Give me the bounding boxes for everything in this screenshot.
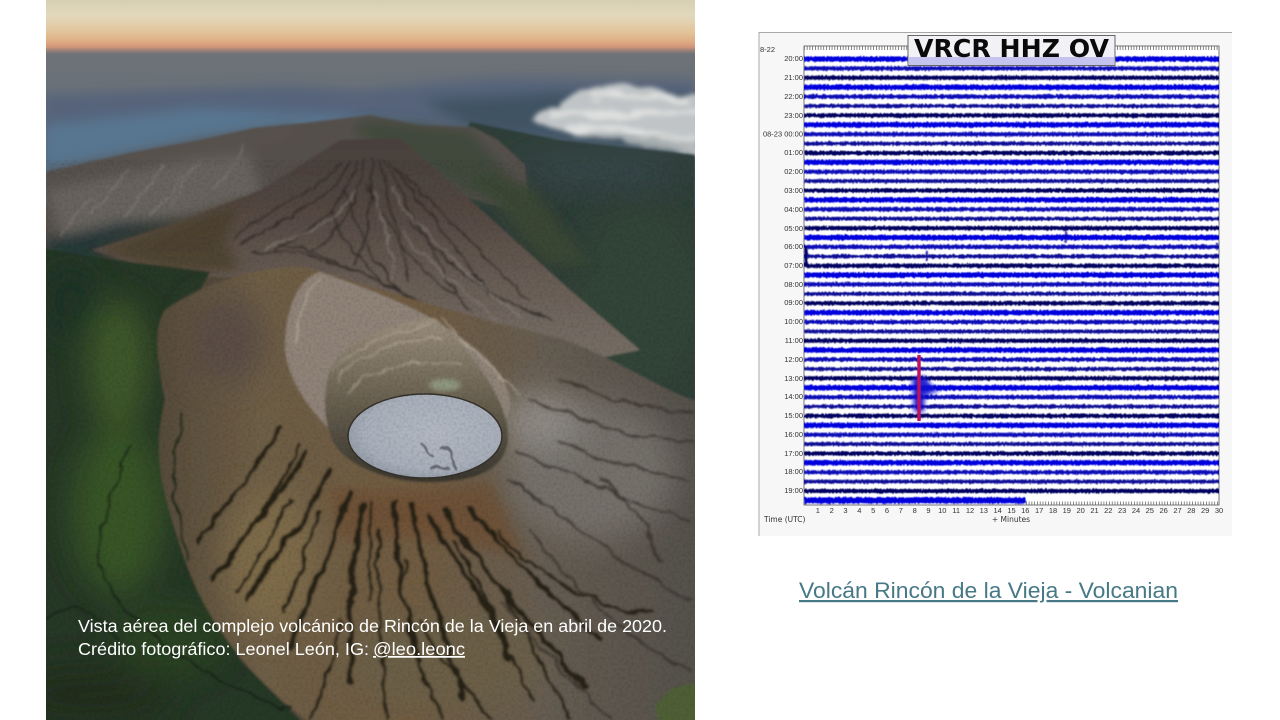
- photo caption: [78, 616, 667, 659]
- seismic event: [912, 355, 940, 421]
- minutes axis labels: 21: [1090, 506, 1099, 515]
- minutes axis labels: 2: [830, 506, 834, 515]
- minutes axis labels: 19: [1063, 506, 1071, 515]
- photo grain texture: [46, 160, 695, 720]
- time axis labels: 16:00: [784, 430, 803, 439]
- minutes axis labels: 30: [1215, 506, 1223, 515]
- minutes axis labels: 26: [1160, 506, 1168, 515]
- panel: aerial photograph of the volcano: [10, 0, 710, 720]
- plot area: [804, 46, 1219, 505]
- time axis labels: 01:00: [784, 148, 803, 157]
- east flank gullies: [500, 380, 695, 720]
- minutes axis labels: 14: [994, 506, 1002, 515]
- minutes axis labels: 4: [857, 506, 861, 515]
- time axis labels: 22:00: [784, 92, 803, 101]
- link heading: Volcán Rincón de la Vieja - Volcanian: [799, 578, 1178, 603]
- minutes axis labels: 20: [1077, 506, 1085, 515]
- time axis labels: 05:00: [784, 224, 803, 233]
- near crater outer flank: [158, 267, 700, 720]
- time axis labels: 17:00: [784, 449, 803, 458]
- time axis labels: 10:00: [784, 317, 803, 326]
- time axis labels: [760, 45, 803, 495]
- minutes axis labels: 15: [1007, 506, 1016, 515]
- crater north rim: [285, 272, 510, 440]
- flank tonal patches: [210, 300, 684, 624]
- minutes axis labels: 12: [966, 506, 974, 515]
- time axis labels: 21:00: [784, 73, 803, 82]
- small spikes: [927, 229, 1217, 261]
- panel: seismogram helicorder: [759, 32, 1232, 536]
- orange oxidised rim band: [330, 482, 525, 560]
- right side dark forest: [468, 121, 695, 400]
- bottom tick marks: [1026, 502, 1219, 504]
- top tick marks: [804, 46, 1219, 50]
- south flank dark radial gullies: [198, 430, 650, 720]
- crater strata: [294, 276, 520, 395]
- time axis labels: 02:00: [784, 167, 803, 176]
- time axis labels: 19:00: [784, 486, 803, 495]
- minutes axis labels: 29: [1201, 506, 1209, 515]
- minutes axis labels: 7: [899, 506, 903, 515]
- helicorder background: [759, 32, 1232, 536]
- minutes axis labels: 6: [885, 506, 889, 515]
- minutes axis labels: 8: [913, 506, 917, 515]
- time axis labels: 03:00: [784, 186, 803, 195]
- minutes axis labels: 27: [1173, 506, 1182, 515]
- west forest stream lines: [46, 410, 290, 710]
- photo base tone: [46, 208, 695, 720]
- crater inner wall: [325, 318, 508, 482]
- left ridge streaks: [60, 145, 245, 235]
- minutes axis labels: 13: [980, 506, 988, 515]
- time axis labels: 11:00: [785, 336, 803, 345]
- minutes axis labels: [816, 506, 1223, 515]
- crater lake: [348, 394, 502, 478]
- minutes axis labels: 23: [1118, 506, 1126, 515]
- distant haze and valley: [46, 48, 695, 208]
- caption line 1: Vista aérea del complejo volcánico de Rincón de la Vieja en abril de 2020.: [78, 616, 667, 636]
- axis title: minutes: + Minutes: [992, 515, 1030, 524]
- title box: VRCR HHZ OV: [914, 34, 1110, 63]
- time axis labels: 07:00: [784, 261, 803, 270]
- fumarole deposit: [429, 379, 461, 391]
- time axis labels: 08-23 00:00: [763, 130, 803, 138]
- time axis labels: 13:00: [784, 374, 803, 383]
- distant mountain range: [46, 78, 695, 170]
- minutes axis labels: 25: [1146, 506, 1154, 515]
- minutes axis labels: 24: [1132, 506, 1140, 515]
- minutes axis labels: 18: [1049, 506, 1057, 515]
- olive summit slopes: [46, 120, 590, 265]
- time axis labels: 18:00: [784, 467, 803, 476]
- minutes axis labels: 3: [843, 506, 848, 515]
- time axis labels: 15:00: [784, 411, 803, 420]
- caption link: @leo.leonc: [373, 639, 465, 659]
- lower right green corner: [655, 683, 695, 720]
- minutes axis labels: 5: [871, 506, 875, 515]
- seismic traces: [804, 59, 1222, 500]
- time axis labels: 04:00: [784, 205, 803, 214]
- final partial trace: [804, 497, 1026, 503]
- time axis labels: 09:00: [784, 298, 803, 307]
- olive-brown west foot of cone: [95, 205, 240, 272]
- left green forest: [40, 248, 310, 720]
- axis title: time: Time (UTC): [763, 515, 806, 524]
- time axis labels: 23:00: [784, 111, 803, 120]
- minutes axis labels: 17: [1035, 506, 1043, 515]
- lake plume marks: [421, 443, 456, 470]
- time axis labels: 12:00: [784, 355, 803, 364]
- time axis labels: 14:00: [784, 392, 803, 401]
- minutes axis labels: 16: [1021, 506, 1029, 515]
- central cone erosion gullies: [232, 160, 555, 325]
- landscape softened together: [10, 115, 710, 720]
- minutes axis labels: 10: [938, 506, 946, 515]
- time axis labels: 20:00: [784, 54, 803, 63]
- time axis labels: 06:00: [784, 242, 803, 251]
- minutes axis labels: 11: [952, 506, 960, 515]
- time axis labels: 8-22: [760, 45, 775, 54]
- minutes axis labels: 28: [1187, 506, 1195, 515]
- left ridge of the massif: [46, 114, 528, 248]
- central ash cone: [92, 138, 640, 370]
- sky at sunset: [46, 0, 695, 54]
- minutes axis labels: 9: [926, 506, 931, 515]
- cloud bank: [530, 85, 700, 155]
- time axis labels: 08:00: [784, 280, 803, 289]
- minutes axis labels: 22: [1104, 506, 1112, 515]
- caption line 2: Crédito fotográfico: Leonel León, IG:: [78, 639, 369, 659]
- minutes axis labels: 1: [816, 506, 820, 515]
